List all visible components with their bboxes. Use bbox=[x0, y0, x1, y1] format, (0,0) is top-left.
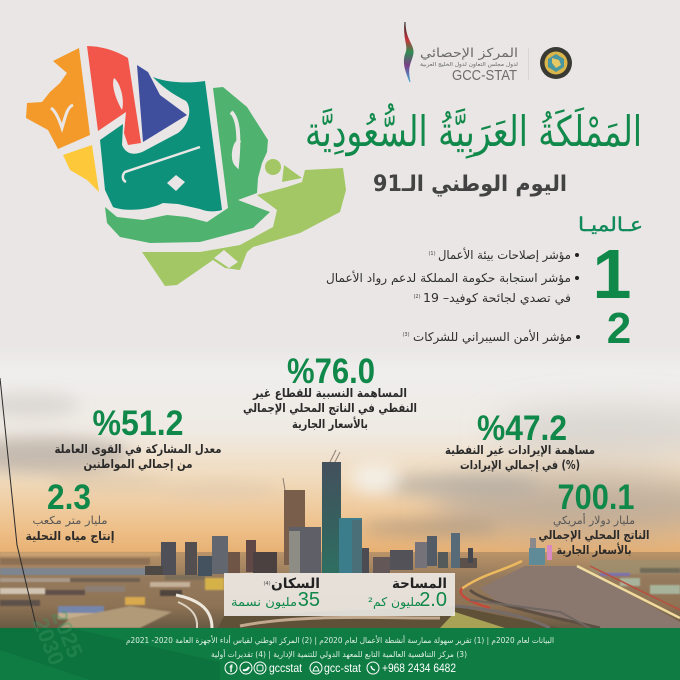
phone number: +968 2434 6482 bbox=[382, 661, 456, 675]
population value: 35 bbox=[298, 589, 320, 611]
stat: 700.1 bbox=[538, 478, 650, 557]
footer: 2025 bbox=[46, 606, 88, 661]
handle: gccstat: gccstat bbox=[269, 661, 303, 675]
stat: 76.0%: المساهمة النسبية للقطاع غير bbox=[252, 386, 407, 400]
black thin line bbox=[0, 378, 49, 680]
rank 1: 1 bbox=[593, 235, 631, 313]
stat: 51.2%: معدل المشاركة في القوى العاملة bbox=[54, 442, 222, 457]
rankings list bbox=[326, 247, 580, 345]
stat: 2.3: 2.3 bbox=[47, 478, 91, 517]
subtitle: 91st National Day: اليوم الوطني الـ91 bbox=[373, 172, 567, 197]
map segment: blue bbox=[137, 65, 187, 142]
stat: 2.3 bbox=[26, 478, 114, 543]
icon: snapchat bbox=[310, 662, 322, 674]
footer bbox=[0, 606, 680, 680]
icon: ribbon bbox=[404, 22, 413, 82]
icon: facebook: f bbox=[229, 664, 233, 675]
rankings list: مؤشر استجابة حكومة المملكة لدعم رواد الأعمال bbox=[326, 270, 571, 286]
map segment: orange bbox=[26, 48, 90, 149]
area label: المساحة bbox=[392, 576, 447, 592]
rankings list: في تصدي لجائحة كوفيد– 19 bbox=[423, 291, 571, 306]
icon: whatsapp bbox=[367, 662, 379, 674]
rankings list: (3) bbox=[402, 332, 410, 338]
stat: 76.0%: النفطي في الناتج المحلي الإجمالي bbox=[243, 401, 417, 415]
map logo: Fi Biladi calligraphy bbox=[26, 46, 346, 286]
area value bbox=[368, 589, 447, 611]
stat: 51.2%: %51.2 bbox=[92, 404, 184, 443]
logo subtitle: لدول مجلس التعاون لدول الخليج العربية bbox=[420, 62, 518, 68]
rankings list: مؤشر الأمن السيبراني للشركات bbox=[413, 329, 572, 345]
rankings list: مؤشر إصلاحات بيئة الأعمال bbox=[438, 247, 571, 263]
stat: 47.2%: %47.2 bbox=[477, 409, 567, 448]
stat: 76.0% bbox=[243, 352, 417, 431]
stat: 2.3: مليار متر مكعب bbox=[32, 514, 108, 527]
stat: 700.1: مليار دولار أمريكي bbox=[553, 513, 635, 527]
population value bbox=[231, 589, 320, 611]
population value: مليون نسمة bbox=[231, 595, 297, 610]
heading: globally: عـالميـا bbox=[578, 214, 643, 236]
rank 2: 2 bbox=[607, 304, 631, 353]
logo arabic name: المركز الإحصائي bbox=[420, 45, 518, 61]
footer: 2030 bbox=[28, 614, 69, 669]
stat: 700.1: بالأسعار الجارية bbox=[556, 542, 632, 557]
stat: 47.2%: مساهمة الإيرادات غير النفطية bbox=[445, 443, 595, 457]
map segment: mid green bbox=[105, 87, 302, 243]
logo latin name: GCC-STAT bbox=[452, 67, 517, 84]
rankings list: (1) bbox=[428, 251, 436, 257]
footnotes: البيانات لعام 2020م | (1) تقرير سهولة ممارسة أنشطة الأعمال لعام 2020م | (2) المركز الوطني لقياس أداء الأجهزة العامة 2020- 2021م bbox=[126, 635, 554, 645]
map segment: red bbox=[87, 46, 141, 145]
stat: 700.1: الناتج المحلي الإجمالي bbox=[538, 528, 650, 542]
area value: 2.0 bbox=[419, 589, 447, 611]
stat: 76.0%: %76.0 bbox=[287, 352, 375, 391]
stat: 47.2%: في إجمالي الإيرادات (%) bbox=[460, 458, 580, 472]
population label: السكان bbox=[271, 576, 320, 592]
rankings list: (2) bbox=[413, 294, 421, 300]
plain and highways bbox=[176, 561, 680, 628]
skyline bbox=[145, 450, 552, 576]
panel: area and population bbox=[224, 573, 455, 616]
map segment: teal bbox=[100, 77, 222, 211]
city ground bbox=[0, 552, 680, 628]
map segment: yellow bbox=[63, 145, 99, 192]
stat: 51.2% bbox=[54, 404, 222, 472]
social handles bbox=[225, 662, 379, 675]
stat: 47.2% bbox=[445, 409, 595, 472]
icon: GCC emblem bbox=[540, 47, 572, 79]
icon: twitter bbox=[240, 662, 252, 674]
stat: 76.0%: بالأسعار الجارية bbox=[292, 416, 368, 431]
stat: 700.1: 700.1 bbox=[558, 478, 634, 517]
panel: area and population: (4) bbox=[263, 581, 271, 587]
handle: gcc-stat: gcc-stat bbox=[324, 661, 362, 675]
GCC-STAT logo bbox=[404, 22, 572, 84]
stat: 2.3: إنتاج مياه التحلية bbox=[26, 529, 114, 543]
map segment: light green bbox=[142, 168, 346, 286]
footer: (3) مركز التنافسية العالمية التابع للمعهد الدولي للتنمية الإدارية | (4) تقديرات أولية bbox=[211, 649, 467, 660]
icon: instagram bbox=[254, 662, 266, 674]
area value: مليون كم² bbox=[368, 595, 421, 610]
stat: 51.2%: من إجمالي المواطنين bbox=[84, 457, 192, 472]
icon: facebook bbox=[225, 662, 237, 675]
